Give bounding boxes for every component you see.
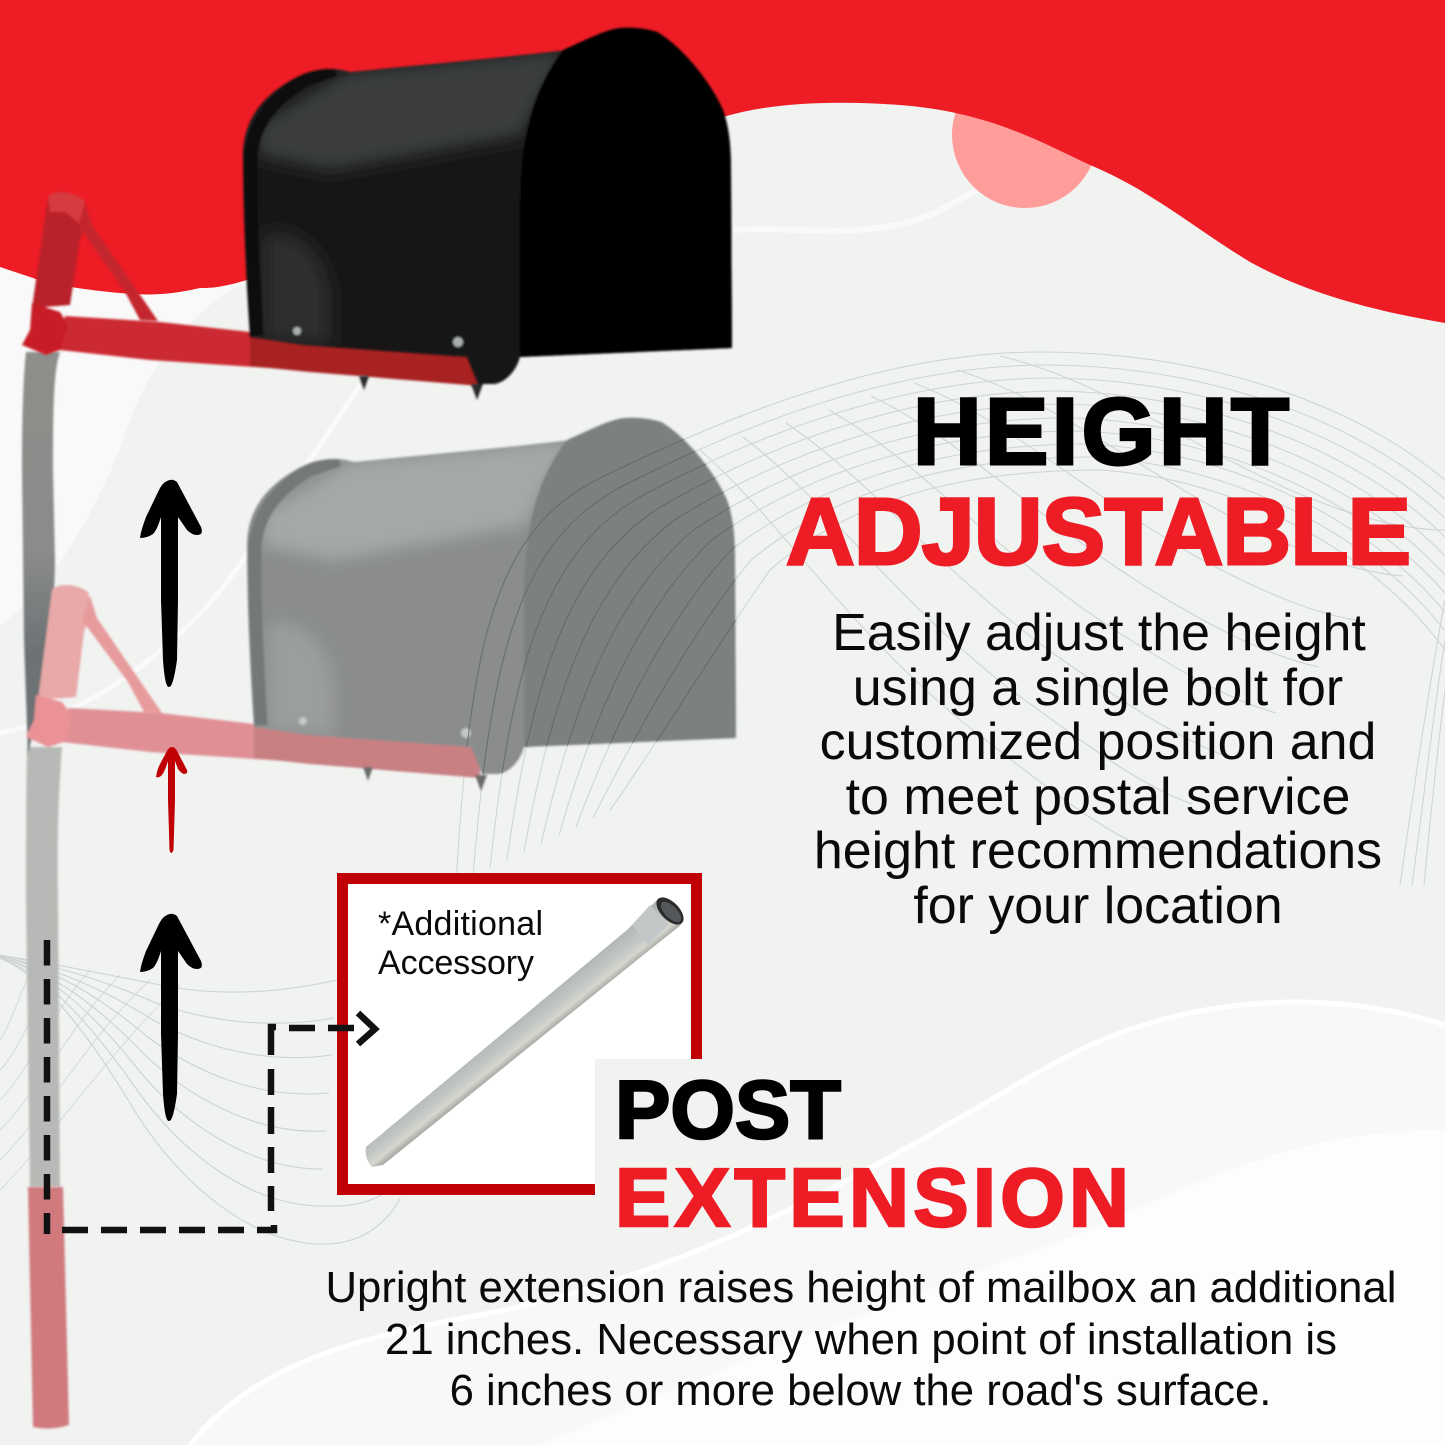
faded mailbox (lower position) — [22, 352, 736, 1187]
red top wave — [0, 0, 1445, 323]
mailbox door — [520, 28, 732, 357]
arrow: lower black — [140, 914, 202, 1121]
extension tube — [366, 893, 688, 1167]
heading: height adjustable: HEIGHT — [913, 379, 1289, 485]
red bracket — [22, 192, 480, 386]
post extension label backing — [595, 1059, 710, 1199]
text block: height description: for your location — [913, 876, 1283, 934]
heading: height adjustable — [786, 379, 1411, 585]
text block: height description: to meet postal service — [846, 767, 1350, 825]
text block: extension description: 21 inches. Necessary when point of installation is — [385, 1315, 1337, 1364]
arrow: top black — [140, 480, 202, 687]
mailbox body — [243, 28, 732, 384]
text block: height description: customized position and — [820, 712, 1376, 770]
mailbox highlights — [251, 50, 567, 345]
text block: extension description: Upright extension raises height of mailbox an additional — [326, 1263, 1396, 1312]
heading second line: EXTENSION — [615, 1151, 1129, 1244]
pink circle — [952, 62, 1098, 208]
mesh lines across faded mailbox — [466, 439, 736, 774]
text block: height description — [814, 603, 1382, 934]
connector arrowhead — [358, 1013, 375, 1044]
text block: extension description — [326, 1263, 1396, 1415]
black mailbox — [243, 28, 732, 400]
heading second line: ADJUSTABLE — [786, 479, 1411, 585]
text block: extension description: 6 inches or more below the road's surface. — [450, 1366, 1271, 1415]
lower red post — [28, 1187, 69, 1429]
text block: height description: Easily adjust the height — [832, 603, 1366, 661]
accessory label: *Additional — [378, 905, 543, 943]
faded mailbox body — [247, 418, 736, 791]
faded post lower section — [26, 747, 62, 1187]
text block: height description: using a single bolt for — [853, 658, 1343, 716]
heading: post extension: POST — [615, 1063, 841, 1156]
mesh wave right — [456, 352, 1445, 885]
upper post section — [22, 352, 60, 755]
text block: height description: height recommendations — [814, 821, 1382, 879]
dashed connector — [47, 940, 375, 1234]
accessory panel — [342, 878, 696, 1190]
arrow: middle red — [156, 747, 187, 853]
heading: post extension — [615, 1063, 1129, 1244]
mesh wave left — [0, 955, 400, 1244]
accessory label line two: Accessory — [378, 944, 534, 982]
mailbox bolts — [293, 327, 301, 335]
faded bracket — [26, 585, 480, 778]
